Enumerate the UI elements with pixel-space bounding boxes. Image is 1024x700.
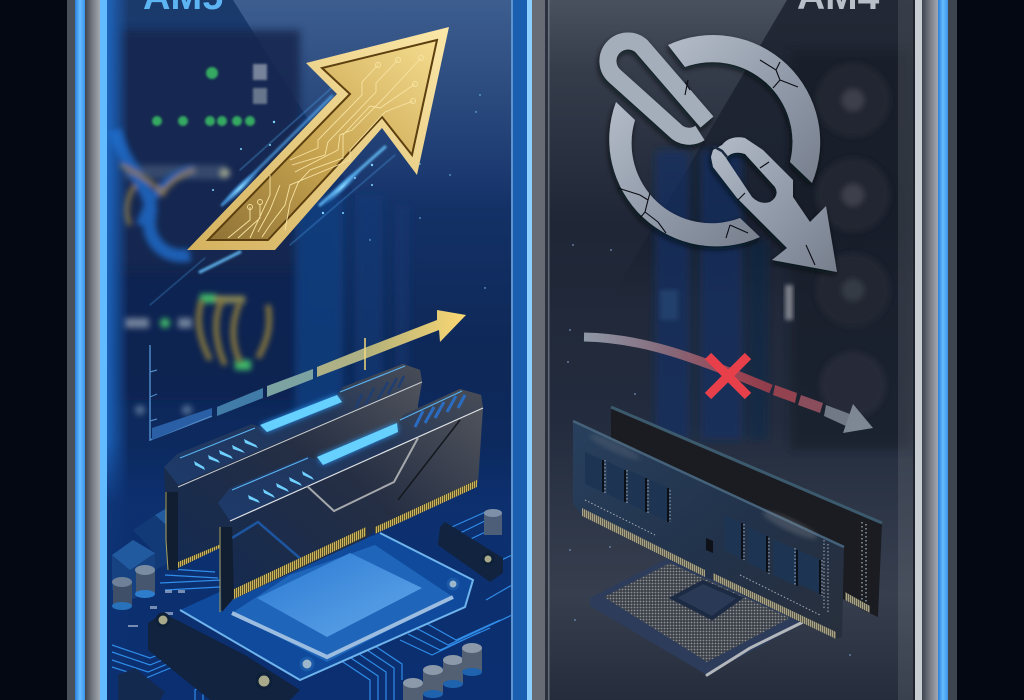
link break gap	[713, 146, 727, 157]
RAM stick AM5 back	[164, 364, 422, 570]
CPU socket AM5	[148, 522, 503, 700]
motherboard with traces	[107, 440, 512, 700]
panel: AM5	[107, 0, 512, 700]
capacitors left	[112, 509, 502, 700]
DDR4 module back	[611, 407, 882, 617]
capacitors right	[403, 643, 482, 700]
icon: gold circuit arrow	[150, 27, 486, 305]
circuit traces on arrow	[228, 56, 424, 238]
dust particles	[567, 244, 851, 656]
declining bandwidth arrow	[584, 337, 873, 433]
red X mark	[708, 356, 748, 396]
icon: broken chain in ring with down arrow	[608, 35, 837, 272]
RAM stick AM5 front	[218, 389, 483, 612]
speed streaks	[150, 84, 486, 305]
frame: left bezel	[67, 0, 107, 700]
memory chips	[585, 452, 820, 594]
frame: center divider	[511, 0, 550, 700]
chart: rising gold bandwidth	[150, 310, 466, 440]
blurred server rack backdrop	[115, 0, 512, 435]
VRM blocks	[112, 509, 167, 599]
upper link	[608, 41, 707, 136]
cracks	[618, 60, 815, 265]
blurred fan backdrop	[651, 0, 913, 450]
CPU socket AM4	[590, 557, 805, 675]
traces	[112, 510, 512, 700]
panel: AM4	[548, 0, 913, 700]
frame: right bezel	[898, 0, 957, 700]
DDR4 module front	[573, 421, 844, 639]
